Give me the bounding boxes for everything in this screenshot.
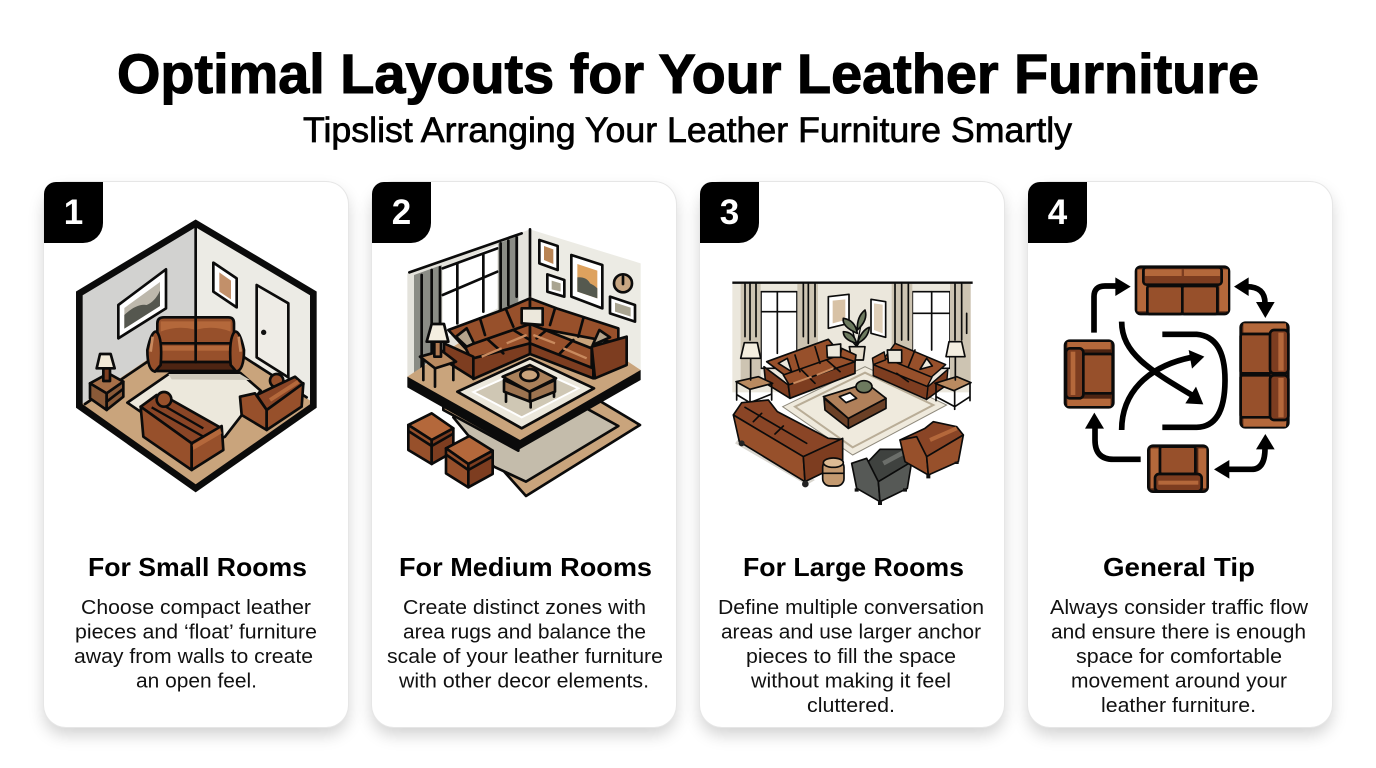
text block: general tip: movement around your <box>1071 670 1287 692</box>
side tables and lamps <box>736 342 971 409</box>
top sofa <box>1136 267 1229 314</box>
title: Optimal Layouts for Your Leather Furniture <box>117 42 1259 105</box>
number badge 3: 3 <box>720 193 739 232</box>
text block: small rooms: pieces and ‘float’ furniture <box>75 622 317 644</box>
text block: small rooms: Choose compact leather <box>81 597 311 619</box>
coffee table <box>503 365 556 407</box>
lower rug <box>443 353 640 496</box>
right back sofa <box>872 343 948 399</box>
text block: small rooms: For Small Rooms <box>88 552 307 582</box>
bottom armchair <box>1148 446 1208 492</box>
icon: medium room isometric illustration <box>406 228 642 498</box>
panel: general tip <box>1028 182 1332 727</box>
panel: medium rooms <box>372 182 676 727</box>
text block: large rooms: cluttered. <box>807 695 895 717</box>
right armchair <box>240 374 303 430</box>
barrel <box>823 458 844 486</box>
back wall with windows and curtains <box>732 283 973 392</box>
text block: large rooms: without making it feel <box>750 670 951 692</box>
icon: traffic flow diagram <box>1064 265 1290 493</box>
circulation arrows <box>1085 277 1275 479</box>
text block: general tip: General Tip <box>1103 552 1255 582</box>
text block: medium rooms: Create distinct zones with <box>403 597 646 619</box>
text block: small rooms <box>74 552 317 692</box>
text block: general tip: and ensure there is enough <box>1051 622 1306 644</box>
text block: general tip <box>1050 552 1309 717</box>
icon: large room isometric illustration <box>732 282 973 505</box>
text block: large rooms <box>718 552 984 717</box>
brown armchair <box>900 422 963 478</box>
text block: medium rooms: For Medium Rooms <box>399 552 652 582</box>
text block: medium rooms: scale of your leather furniture <box>387 646 663 668</box>
subtitle: Tipslist Arranging Your Leather Furniture Smartly <box>303 111 1073 150</box>
number badge 1: 1 <box>64 193 83 232</box>
text block: medium rooms: with other decor elements. <box>398 670 649 692</box>
number badge 1 <box>44 182 103 243</box>
text block: general tip: space for comfortable <box>1076 646 1282 668</box>
coffee table <box>823 381 886 428</box>
number badge 4 <box>1028 182 1087 243</box>
area rug <box>783 367 947 455</box>
text block: large rooms: pieces to fill the space <box>746 646 956 668</box>
front left sofa <box>141 392 223 470</box>
number badge 2: 2 <box>392 193 411 232</box>
sectional sofa <box>444 298 627 379</box>
right sofa <box>1241 323 1288 427</box>
panel: large rooms <box>700 182 1004 727</box>
number badge 3 <box>700 182 759 243</box>
ottomans <box>408 413 493 487</box>
number badge 4: 4 <box>1048 193 1067 232</box>
left back sofa <box>764 339 856 398</box>
back sofa <box>147 317 244 372</box>
text block: large rooms: areas and use larger anchor <box>721 622 981 644</box>
long sofa <box>733 400 843 487</box>
text block: small rooms: away from walls to create <box>74 646 313 668</box>
room outline <box>79 223 313 488</box>
wall art and clock <box>539 240 635 322</box>
text block: general tip: Always consider traffic flow <box>1050 597 1309 619</box>
wall art and door <box>118 263 288 377</box>
text block: medium rooms <box>387 552 663 692</box>
side table and lamp <box>420 324 456 387</box>
potted plant <box>843 310 869 360</box>
text block: large rooms: For Large Rooms <box>743 552 964 582</box>
text block: large rooms: Define multiple conversation <box>718 597 984 619</box>
text block: small rooms: an open feel. <box>136 670 257 692</box>
left armchair <box>1065 341 1113 407</box>
icon: small room isometric illustration <box>76 220 317 492</box>
walls <box>407 229 641 377</box>
number badge 2 <box>372 182 431 243</box>
text block: medium rooms: area rugs and balance the <box>403 622 646 644</box>
crossing flow arrows <box>1122 322 1225 430</box>
platform floor <box>407 297 641 450</box>
panel: small rooms <box>44 182 348 727</box>
room walls and floor <box>79 223 313 488</box>
side table and lamp <box>90 354 123 410</box>
text block: general tip: leather furniture. <box>1101 695 1256 717</box>
grey armchair <box>852 449 913 505</box>
